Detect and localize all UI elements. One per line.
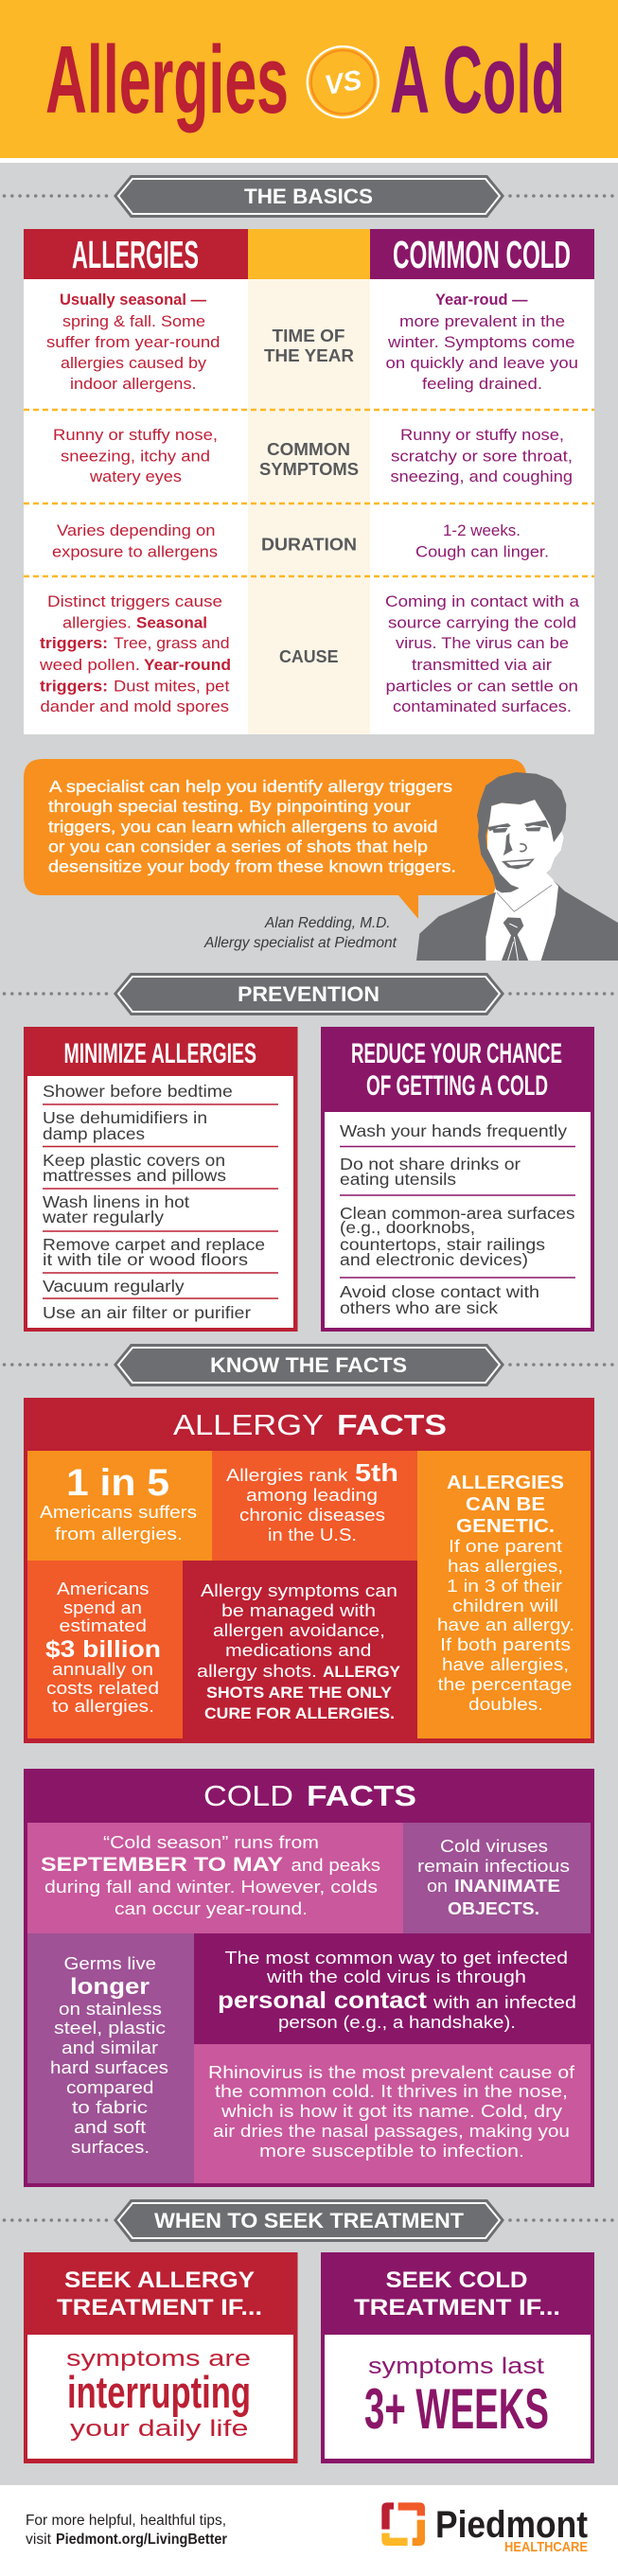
allergy prevention list: damp places <box>43 1124 145 1143</box>
row: time of the year: THE YEAR <box>264 346 354 365</box>
row: common symptoms: scratchy or sore throat, <box>391 447 573 466</box>
icon: piedmont logo mark <box>381 2502 425 2546</box>
fact: inanimate objects: Cold viruses <box>440 1837 548 1856</box>
heading: cold facts: FACTS <box>307 1779 416 1812</box>
fact: 5th chronic disease: 5th <box>355 1458 398 1487</box>
row: cause: CAUSE <box>279 647 339 666</box>
fact: genetic: have allergies, <box>442 1655 569 1674</box>
fact: germs live longer: steel, plastic <box>54 2019 166 2038</box>
row: cause: Dust mites, pet <box>114 678 230 695</box>
fact: rhinovirus: which is how it got its name. Cold, dry <box>221 2102 562 2121</box>
row: time of the year: feeling drained. <box>422 375 542 393</box>
row: time of the year: indoor allergens. <box>70 375 197 393</box>
section banner: the basics: THE BASICS <box>244 185 373 208</box>
row: cause: triggers: <box>40 634 108 652</box>
attribution: Allergy specialist at Piedmont <box>203 935 397 951</box>
table heading: allergies: ALLERGIES <box>72 233 199 276</box>
fact: cold season: and peaks <box>291 1856 380 1875</box>
fact: 3 billion: estimated <box>59 1616 147 1635</box>
allergy prevention list: Use dehumidifiers in <box>43 1108 207 1127</box>
row: time of the year: TIME OF <box>273 326 344 345</box>
row: time of the year: allergies caused by <box>61 354 207 372</box>
fact: 5th chronic disease: chronic diseases <box>239 1506 385 1525</box>
row: cause: Seasonal <box>136 613 207 632</box>
fact: genetic: have an allergy. <box>437 1615 574 1634</box>
icon: vs badge <box>308 46 379 117</box>
fact: genetic: GENETIC. <box>456 1516 555 1537</box>
row: cause: source carrying the cold <box>388 613 576 632</box>
fact: allergy shots: CURE FOR ALLERGIES. <box>204 1704 395 1722</box>
fact: rhinovirus: more susceptible to infection. <box>259 2142 524 2161</box>
panel: seek allergy treatment <box>24 2252 297 2463</box>
fact: 1 in 5 <box>27 1451 212 1561</box>
section banner: know the facts <box>4 1344 616 1386</box>
header band <box>0 0 618 163</box>
panel heading: seek cold treatment: TREATMENT IF... <box>354 2295 560 2320</box>
callout text: symptoms last 3+ weeks: symptoms last <box>368 2354 544 2379</box>
fact: inanimate objects: INANIMATE <box>454 1877 560 1896</box>
fact: genetic: has allergies, <box>448 1557 563 1576</box>
panel heading: minimize allergies: MINIMIZE ALLERGIES <box>64 1038 256 1069</box>
callout text: symptoms are interrupting: interrupting <box>67 2367 251 2417</box>
fact: 3 billion: annually on <box>52 1660 153 1679</box>
panel: allergy facts <box>24 1398 594 1743</box>
fact: personal contact: person (e.g., a handshake). <box>278 2013 516 2032</box>
cold prevention list: Clean common-area surfaces <box>340 1204 575 1223</box>
row: common symptoms: Runny or stuffy nose, <box>400 426 564 444</box>
icon: doctor portrait <box>416 772 618 961</box>
row: common symptoms: Runny or stuffy nose, <box>53 426 218 444</box>
cold prevention list: (e.g., doorknobs, <box>340 1218 475 1237</box>
row: duration: DURATION <box>261 536 357 555</box>
panel: reduce your chance <box>321 1027 594 1332</box>
row: cause: Year-round <box>144 656 231 674</box>
row: cause <box>39 592 580 715</box>
panel: seek cold treatment <box>321 2252 594 2463</box>
fact: personal contact: personal contact <box>218 1987 428 2014</box>
cold prevention list: eating utensils <box>340 1170 456 1189</box>
fact: 1 in 5: from allergies. <box>55 1525 183 1544</box>
fact: rhinovirus: the common cold. It thrives in the nose, <box>215 2082 568 2101</box>
allergy prevention list: Shower before bedtime <box>43 1082 233 1101</box>
cold prevention list: Wash your hands frequently <box>340 1121 567 1140</box>
fact: allergy shots: allergen avoidance, <box>213 1621 385 1640</box>
row: cause: weed pollen. <box>39 656 140 674</box>
footer note <box>26 2513 227 2548</box>
fact: germs live longer: and soft <box>74 2118 146 2137</box>
row: time of the year: suffer from year-round <box>46 333 220 351</box>
panel heading: seek allergy treatment <box>57 2267 262 2320</box>
fact: cold season: SEPTEMBER TO MAY <box>41 1854 283 1876</box>
fact: rhinovirus <box>194 2044 591 2183</box>
callout text: symptoms are interrupting: your daily life <box>70 2416 248 2442</box>
section banner: when to seek treatment <box>4 2199 616 2242</box>
row: common symptoms: watery eyes <box>89 468 182 485</box>
fact: cold season <box>27 1823 403 1933</box>
callout: specialist quote: A specialist can help you identify allergy triggers <box>49 777 452 796</box>
fact: genetic: the percentage <box>437 1675 572 1694</box>
fact: personal contact: The most common way to get infected <box>225 1949 568 1967</box>
row: common symptoms <box>53 426 573 485</box>
logo wordmark: Piedmont <box>435 2504 588 2546</box>
allergy prevention list: Keep plastic covers on <box>43 1151 225 1170</box>
heading: allergy facts: ALLERGY <box>173 1408 324 1441</box>
row: time of the year: on quickly and leave you <box>386 354 578 372</box>
panel heading: reduce your chance <box>351 1038 562 1102</box>
row: duration: Varies depending on <box>57 521 216 539</box>
fact: genetic: ALLERGIES <box>447 1473 564 1493</box>
section banner: prevention: PREVENTION <box>238 982 380 1006</box>
row: cause: Distinct triggers cause <box>47 592 222 610</box>
logo wordmark: HEALTHCARE <box>504 2539 588 2555</box>
section banner: when to seek treatment: WHEN TO SEEK TREATMENT <box>154 2209 465 2232</box>
allergy prevention list: it with tile or wood floors <box>43 1250 248 1269</box>
panel: cold facts <box>24 1769 594 2187</box>
title: allergies: Allergies <box>45 27 289 133</box>
fact: 5th chronic disease <box>212 1451 417 1561</box>
row: cause: particles or can settle on <box>386 678 578 695</box>
fact: cold season: during fall and winter. However, colds <box>44 1878 378 1897</box>
fact: allergy shots: allergy shots. <box>197 1662 317 1681</box>
fact: 5th chronic disease: in the U.S. <box>268 1526 357 1544</box>
fact: inanimate objects: OBJECTS. <box>448 1899 539 1918</box>
fact: allergy shots: ALLERGY <box>323 1663 401 1681</box>
row: time of the year: spring & fall. Some <box>62 312 205 330</box>
allergy prevention list: Remove carpet and replace <box>43 1235 265 1254</box>
row: time of the year <box>46 291 578 393</box>
row: duration: Cough can linger. <box>415 543 549 560</box>
cold prevention list: and electronic devices) <box>340 1250 528 1269</box>
allergy prevention list: Vacuum regularly <box>43 1277 185 1296</box>
row: common symptoms: sneezing, and coughing <box>390 468 573 485</box>
row: common symptoms: sneezing, itchy and <box>61 447 210 466</box>
callout: specialist quote: desensitize your body from these known triggers. <box>48 857 456 876</box>
heading: allergy facts <box>173 1408 447 1441</box>
fact: 3 billion: spend an <box>63 1598 142 1617</box>
fact: germs live longer: on stainless <box>59 2000 162 2019</box>
fact: 3 billion: Americans <box>57 1579 150 1598</box>
fact: germs live longer <box>27 1933 194 2183</box>
fact: personal contact: with the cold virus is through <box>266 1967 526 1986</box>
footer note: For more helpful, healthful tips, <box>26 2513 226 2529</box>
callout: specialist quote: triggers, you can learn which allergens to avoid <box>48 817 437 836</box>
row: common symptoms: SYMPTOMS <box>259 460 359 479</box>
row: time of the year: Usually seasonal — <box>60 291 206 309</box>
fact: allergy shots <box>183 1561 417 1743</box>
fact: rhinovirus: air dries the nasal passages, making you <box>213 2122 570 2141</box>
allergy prevention list: Wash linens in hot <box>43 1192 189 1211</box>
fact: allergy shots: medications and <box>225 1641 371 1660</box>
row: cause: contaminated surfaces. <box>393 697 572 715</box>
cold prevention list <box>340 1121 575 1317</box>
fact: genetic: If both parents <box>440 1635 571 1654</box>
allergy prevention list: Use an air filter or purifier <box>43 1303 251 1322</box>
row: cause: Coming in contact with a <box>385 592 580 610</box>
footer <box>0 2485 618 2576</box>
row: cause: virus. The virus can be <box>396 634 569 652</box>
row: time of the year: more prevalent in the <box>399 312 565 330</box>
fact: 5th chronic disease: among leading <box>246 1486 378 1505</box>
comparison table <box>24 229 594 734</box>
fact: personal contact <box>218 1949 576 2032</box>
fact: cold season: “Cold season” runs from <box>103 1833 319 1852</box>
fact: genetic: children will <box>452 1597 558 1615</box>
panel: minimize allergies <box>24 1027 297 1332</box>
cold prevention list: Do not share drinks or <box>340 1155 521 1173</box>
callout text: symptoms are interrupting <box>66 2346 251 2442</box>
panel heading: seek cold treatment <box>354 2267 560 2320</box>
row: cause: Tree, grass and <box>114 634 229 652</box>
fact: allergy shots: SHOTS ARE THE ONLY <box>206 1684 393 1702</box>
fact: genetic: doubles. <box>468 1695 543 1714</box>
row: cause: dander and mold spores <box>40 697 229 715</box>
allergy prevention list <box>42 1082 265 1322</box>
heading: allergy facts: FACTS <box>337 1408 447 1441</box>
fact: cold season: can occur year-round. <box>115 1899 308 1918</box>
footer note: visit <box>26 2532 52 2548</box>
fact: germs live longer: Germs live <box>64 1954 156 1973</box>
heading: cold facts <box>203 1779 416 1812</box>
fact: genetic: CAN BE <box>466 1494 545 1515</box>
callout: specialist quote: or you can consider a series of shots that help <box>48 837 428 856</box>
callout text: symptoms are interrupting: symptoms are <box>66 2346 251 2372</box>
allergy prevention list: water regularly <box>42 1208 164 1226</box>
section banner: prevention <box>4 973 616 1015</box>
fact: allergy shots: Allergy symptoms can <box>201 1581 397 1600</box>
fact: inanimate objects: on <box>427 1877 448 1896</box>
row: duration: 1-2 weeks. <box>443 521 521 539</box>
row: common symptoms: COMMON <box>267 440 350 459</box>
row: cause: allergies. <box>62 613 132 632</box>
fact: allergy shots: be managed with <box>221 1601 376 1620</box>
callout text: symptoms last 3+ weeks <box>364 2354 549 2441</box>
section banner: know the facts: KNOW THE FACTS <box>210 1353 407 1377</box>
attribution <box>203 915 397 951</box>
footer note: Piedmont.org/LivingBetter <box>56 2532 227 2548</box>
fact: 3 billion: to allergies. <box>52 1697 154 1716</box>
fact: germs live longer: hard surfaces <box>50 2058 168 2077</box>
fact: 1 in 5: 1 in 5 <box>66 1462 169 1504</box>
cold prevention list: Avoid close contact with <box>340 1282 539 1301</box>
cold prevention list: others who are sick <box>340 1298 498 1317</box>
callout: specialist quote: through special testing. By pinpointing your <box>48 797 411 816</box>
callout: specialist quote <box>24 759 526 919</box>
panel heading: seek cold treatment: SEEK COLD <box>386 2267 528 2293</box>
allergy prevention list: mattresses and pillows <box>43 1166 226 1185</box>
section banner: the basics <box>4 175 616 218</box>
fact: 5th chronic disease: Allergies rank <box>226 1466 349 1485</box>
fact: germs live longer: compared <box>66 2078 153 2097</box>
fact: 3 billion: $3 billion <box>45 1636 161 1663</box>
fact: 1 in 5: Americans suffers <box>40 1503 197 1522</box>
row: duration: exposure to allergens <box>52 543 218 560</box>
fact: germs live longer: to fabric <box>72 2098 148 2117</box>
row: duration <box>52 521 549 560</box>
fact: personal contact: with an infected <box>433 1993 576 2012</box>
panel heading: seek allergy treatment: SEEK ALLERGY <box>64 2267 255 2293</box>
fact: 3 billion <box>27 1561 183 1738</box>
fact: germs live longer: and similar <box>62 2038 158 2057</box>
fact: genetic: If one parent <box>449 1537 562 1556</box>
fact: 3 billion: costs related <box>46 1679 159 1698</box>
heading: cold facts: COLD <box>203 1779 293 1812</box>
row: cause: triggers: <box>40 678 108 695</box>
icon: vs badge: VS <box>323 65 364 101</box>
row: cause: transmitted via air <box>412 656 552 674</box>
fact: genetic: 1 in 3 of their <box>447 1577 562 1596</box>
fact: rhinovirus: Rhinovirus is the most prevalent cause of <box>208 2063 575 2082</box>
attribution: Alan Redding, M.D. <box>264 915 390 931</box>
panel heading: seek allergy treatment: TREATMENT IF... <box>57 2295 262 2320</box>
cold prevention list: countertops, stair railings <box>340 1235 545 1254</box>
row: time of the year: winter. Symptoms come <box>387 333 575 351</box>
fact: inanimate objects <box>403 1823 591 1933</box>
fact: germs live longer: longer <box>70 1974 150 2000</box>
fact: germs live longer: surfaces. <box>71 2138 150 2157</box>
fact: inanimate objects: remain infectious <box>417 1857 570 1876</box>
fact: genetic <box>417 1451 591 1738</box>
row: time of the year: Year-roud — <box>435 291 528 309</box>
